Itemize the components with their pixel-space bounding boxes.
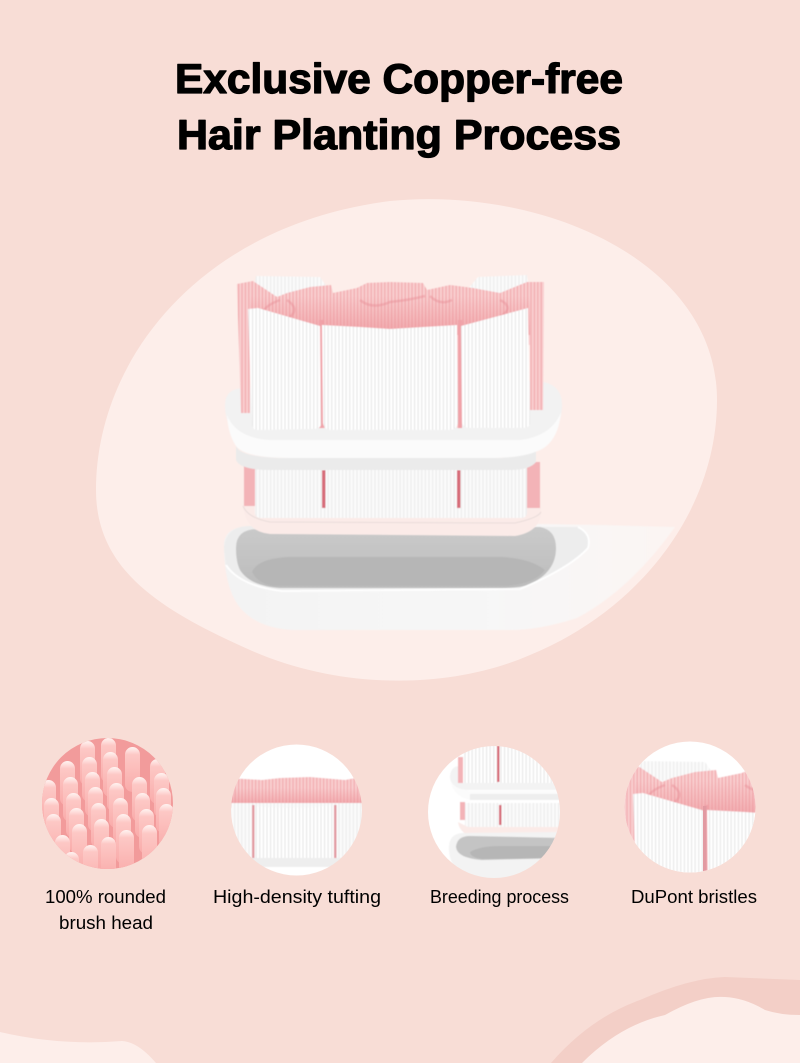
feature 4: DuPont bristles: [624, 742, 756, 872]
hero blob backdrop: [96, 199, 717, 681]
feature 2: high-density tufting: [228, 742, 366, 880]
title: Exclusive Copper-free: [175, 55, 623, 102]
background blob: bottom left: [0, 1032, 156, 1063]
title: Hair Planting Process: [177, 111, 621, 158]
collar: [225, 381, 562, 470]
label: DuPont bristles: DuPont bristles: [631, 887, 757, 907]
circle: layered head close-up: [426, 744, 562, 880]
base and handle: [224, 524, 675, 630]
bristle tufts: [237, 275, 544, 430]
label: high-density tufting: High-density tufting: [213, 887, 381, 907]
label: breeding process: Breeding process: [430, 887, 569, 907]
circle: angled bristles close-up: [624, 742, 756, 872]
circle: bristle close-up: [42, 738, 173, 869]
label: 100% rounded brush head: brush head: [59, 913, 153, 933]
feature 3: breeding process: [426, 744, 562, 880]
feature 1: rounded brush head: [42, 738, 173, 869]
toothbrush head illustration: [224, 275, 675, 630]
label: 100% rounded brush head: [45, 887, 166, 933]
lower bristles and ring: [243, 462, 541, 536]
title: [175, 55, 623, 158]
label: 100% rounded brush head: 100% rounded: [45, 887, 166, 907]
circle: tufts close-up: [228, 742, 366, 880]
background blob: bottom right dark: [551, 977, 800, 1063]
background blob: bottom right light: [582, 997, 800, 1063]
